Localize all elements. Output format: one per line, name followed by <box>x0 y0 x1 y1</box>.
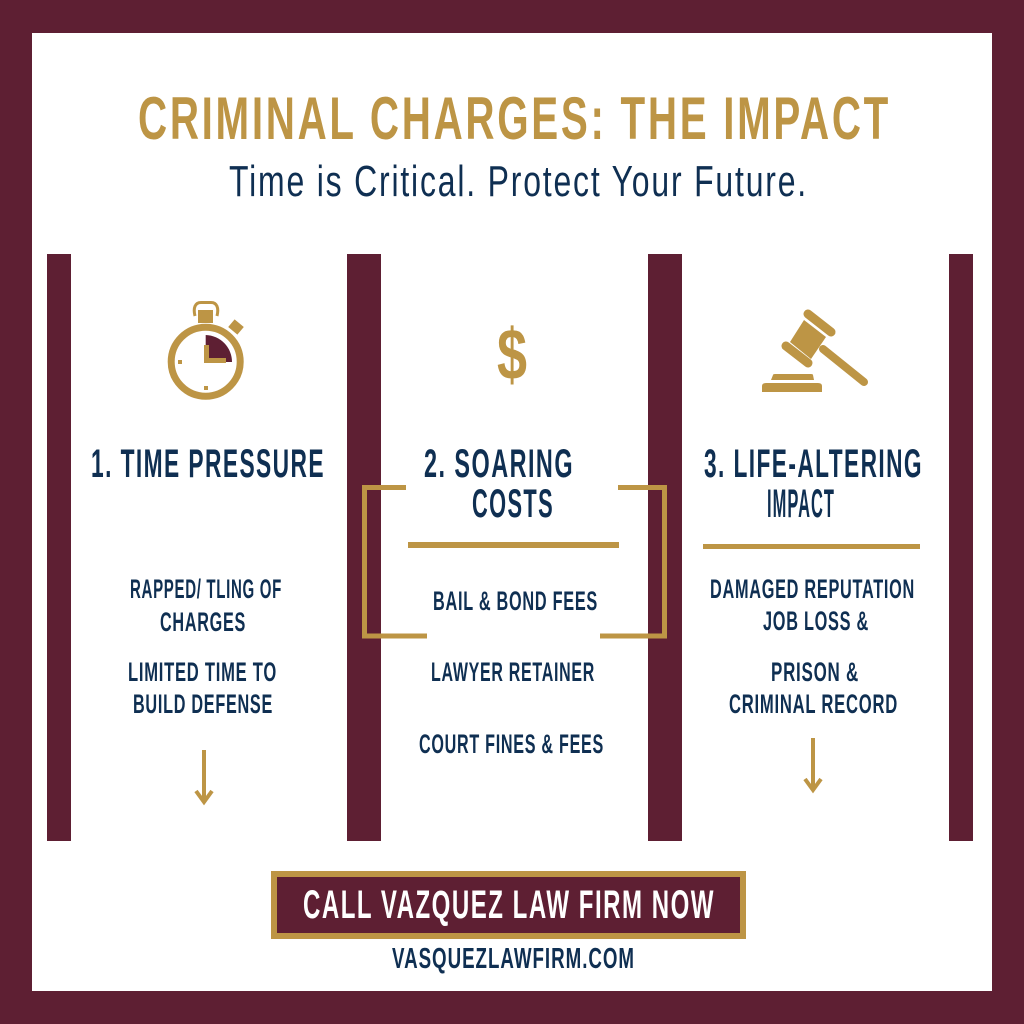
website url: VASQUEZLAWFIRM.COM <box>392 943 635 975</box>
text: prison: PRISON & <box>771 657 859 687</box>
subtitle: Time is Critical. Protect Your Future. <box>229 157 808 206</box>
text: bail: BAIL & BOND FEES <box>433 586 598 616</box>
text: charges: RAPPED/ TLING OF <box>130 574 282 604</box>
heading: life-altering impact: IMPACT <box>767 482 835 526</box>
text: charges <box>130 574 282 637</box>
text: limited time <box>128 657 277 719</box>
text: reputation <box>710 574 915 636</box>
text: court fines: COURT FINES & FEES <box>419 729 604 759</box>
arrow: down <box>196 750 212 802</box>
text: limited time: BUILD DEFENSE <box>133 689 273 719</box>
call to action button <box>274 874 743 936</box>
column divider bars <box>47 254 973 841</box>
panel: soaring costs <box>364 315 664 759</box>
icon: dollar sign: $ <box>497 315 527 395</box>
icon: stopwatch <box>171 302 244 396</box>
text: charges: CHARGES <box>160 607 246 637</box>
heading: time pressure: 1. TIME PRESSURE <box>91 442 325 486</box>
text: prison: CRIMINAL RECORD <box>729 689 898 719</box>
text: prison <box>729 657 898 719</box>
divider: soaring costs <box>408 542 619 548</box>
icon: gavel <box>762 314 864 392</box>
heading: soaring costs <box>424 442 574 526</box>
arrow: down <box>805 738 821 790</box>
heading: life-altering impact <box>704 442 923 526</box>
bracket: left <box>364 488 427 636</box>
text: reputation: JOB LOSS & <box>763 606 869 636</box>
heading: soaring costs: 2. SOARING <box>424 442 574 486</box>
panel: life-altering impact <box>703 314 923 790</box>
text: lawyer: LAWYER RETAINER <box>431 657 595 687</box>
bracket: right <box>600 488 664 636</box>
call to action button: CALL VAZQUEZ LAW FIRM NOW <box>303 883 715 927</box>
heading: soaring costs: COSTS <box>472 482 554 526</box>
panel: time pressure <box>91 302 325 802</box>
text: limited time: LIMITED TIME TO <box>128 657 277 687</box>
divider: life-altering impact <box>703 544 920 549</box>
